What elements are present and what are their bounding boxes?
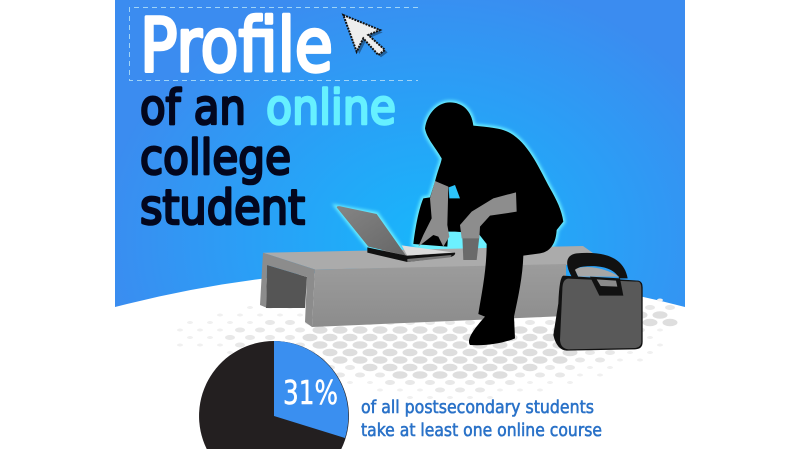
- caption: [361, 397, 602, 441]
- halftone dot floor: [180, 300, 690, 398]
- blue background panel: [115, 0, 685, 449]
- subtitle: of an online college student: online: [266, 80, 396, 136]
- sky gap under the arm: [449, 185, 460, 198]
- student silhouette: [413, 102, 563, 345]
- student arms: [418, 181, 517, 247]
- subtitle: of an online college student: student: [140, 180, 305, 236]
- cyan glow behind the student: [337, 102, 563, 257]
- caption: take at least one online course: [361, 420, 602, 441]
- figure group: student, laptop, cup: [337, 102, 563, 345]
- subtitle: of an online college student: [140, 80, 396, 236]
- caption: of all postsecondary students: [361, 397, 594, 418]
- subtitle: of an online college student: college: [140, 130, 291, 186]
- dashed selection box: [130, 8, 418, 80]
- title: Profile: Profile: [140, 3, 333, 89]
- icon: mouse cursor: [343, 15, 388, 57]
- subtitle: of an online college student: of an: [140, 80, 246, 136]
- laptop: [337, 206, 455, 262]
- bench: [260, 246, 600, 327]
- pie chart: 31%: 31%: [283, 373, 338, 412]
- bag: [553, 253, 643, 351]
- cup: [462, 237, 479, 260]
- pie chart: 31%: [199, 341, 349, 449]
- white ground: [115, 270, 685, 449]
